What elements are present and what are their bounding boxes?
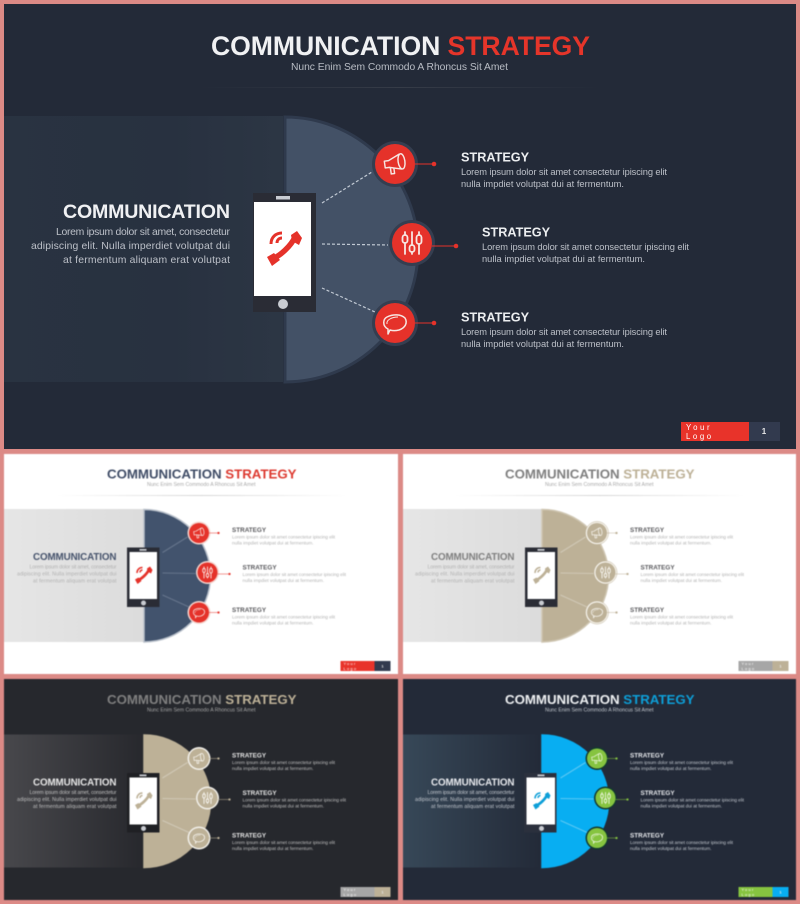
left text block: Lorem ipsum dolor sit amet, consectetur [30, 564, 117, 570]
strategy item 2: nulla impdiet volutpat dui at fermentum. [482, 254, 645, 264]
subtitle: Nunc Enim Sem Commodo A Rhoncus Sit Amet [545, 482, 654, 488]
strategy item 1: Lorem ipsum dolor sit amet consectetur ipiscing elit [630, 534, 734, 540]
left text block [415, 778, 515, 810]
connectors [560, 762, 594, 832]
footer logo and page number: Your [344, 887, 357, 892]
left text block: at fermentum aliquam erat volutpat [33, 578, 117, 584]
left text block: Lorem ipsum dolor sit amet, consectetur [56, 227, 231, 238]
strategy item 1: Lorem ipsum dolor sit amet consectetur ipiscing elit [630, 760, 734, 765]
strategy item 3 [586, 826, 734, 851]
strategy item 1: nulla impdiet volutpat dui at fermentum. [630, 540, 712, 546]
strategy item 2 [196, 786, 347, 810]
strategy item 1: nulla impdiet volutpat dui at fermentum. [232, 540, 314, 546]
strategy item 2 [196, 561, 347, 584]
half circle [144, 735, 211, 868]
strategy item 3: Lorem ipsum dolor sit amet consectetur ipiscing elit [630, 614, 734, 620]
strategy item 3: nulla impdiet volutpat dui at fermentum. [630, 620, 712, 626]
phone icon [253, 193, 316, 312]
strategy item 3: nulla impdiet volutpat dui at fermentum. [461, 339, 624, 349]
strategy item 1 [372, 141, 667, 189]
strategy item 2: nulla impdiet volutpat dui at fermentum. [640, 578, 722, 583]
half circle [144, 510, 211, 642]
strategy item 2: STRATEGY [640, 790, 675, 797]
phone icon [525, 548, 558, 607]
strategy item 1 [586, 522, 734, 546]
left text block: at fermentum aliquam erat volutpat [431, 804, 515, 810]
strategy item 3: nulla impdiet volutpat dui at fermentum. [232, 846, 314, 851]
strategy item 2: Lorem ipsum dolor sit amet consectetur ipiscing elit [640, 798, 745, 802]
footer logo and page number: Your [686, 423, 712, 432]
left text block: adipiscing elit. Nulla imperdiet volutpat dui [17, 572, 116, 578]
strategy item 1: nulla impdiet volutpat dui at fermentum. [461, 179, 624, 189]
left text block: at fermentum aliquam erat volutpat [431, 578, 515, 584]
strategy item 2 [594, 786, 745, 810]
strategy item 2: nulla impdiet volutpat dui at fermentum. [242, 578, 324, 583]
footer logo and page number: 1 [381, 890, 384, 894]
left text block: COMMUNICATION [33, 778, 116, 788]
subtitle: Nunc Enim Sem Commodo A Rhoncus Sit Amet [545, 708, 654, 714]
strategy item 1: Lorem ipsum dolor sit amet consectetur ipiscing elit [461, 167, 667, 177]
strategy item 1: STRATEGY [461, 150, 530, 164]
panel: charcoal slide, gray and tan [4, 679, 398, 900]
panel: navy slide, blue and green [403, 679, 796, 900]
dashed connectors [322, 172, 388, 312]
strategy item 3: Lorem ipsum dolor sit amet consectetur ipiscing elit [461, 327, 667, 337]
strategy item 1 [586, 747, 734, 771]
strategy item 1: STRATEGY [630, 527, 665, 534]
strategy item 3: STRATEGY [630, 607, 665, 614]
connectors [162, 762, 196, 832]
strategy item 2: Lorem ipsum dolor sit amet consectetur ipiscing elit [640, 572, 745, 577]
strategy item 3: nulla impdiet volutpat dui at fermentum. [630, 846, 712, 851]
strategy item 3: STRATEGY [232, 607, 267, 614]
left text block: COMMUNICATION [33, 552, 116, 563]
panel: main dark slide [4, 4, 796, 449]
left text block: COMMUNICATION [63, 201, 230, 223]
footer logo and page number: 1 [381, 664, 384, 668]
strategy item 3 [372, 300, 667, 349]
footer logo and page number: 1 [779, 890, 782, 894]
footer logo and page number: Logo [344, 892, 357, 897]
footer logo and page number [681, 422, 780, 441]
footer logo and page number: Your [344, 661, 357, 666]
strategy item 1 [188, 747, 336, 771]
strategy item 1: STRATEGY [630, 752, 665, 759]
footer logo and page number: Logo [742, 892, 755, 897]
strategy item 3: STRATEGY [232, 832, 267, 839]
strategy item 3: Lorem ipsum dolor sit amet consectetur ipiscing elit [630, 840, 734, 845]
strategy item 3: STRATEGY [630, 832, 665, 839]
strategy item 2 [389, 220, 689, 266]
title: COMMUNICATION STRATEGY [107, 692, 297, 707]
footer logo and page number: Logo [742, 666, 755, 671]
connectors [560, 537, 594, 607]
left band [4, 734, 144, 868]
strategy item 2: STRATEGY [242, 564, 277, 571]
strategy item 3: STRATEGY [461, 310, 530, 324]
strategy item 1: STRATEGY [232, 752, 267, 759]
strategy item 2: Lorem ipsum dolor sit amet consectetur ipiscing elit [242, 798, 347, 802]
strategy item 1: STRATEGY [232, 527, 267, 534]
footer logo and page number: Your [742, 887, 755, 892]
footer logo and page number [738, 887, 788, 897]
strategy item 1: Lorem ipsum dolor sit amet consectetur ipiscing elit [232, 534, 336, 540]
strategy item 1: nulla impdiet volutpat dui at fermentum. [630, 766, 712, 771]
strategy item 3 [586, 601, 734, 626]
strategy item 1: nulla impdiet volutpat dui at fermentum. [232, 766, 314, 771]
subtitle: Nunc Enim Sem Commodo A Rhoncus Sit Amet [147, 708, 256, 714]
strategy item 2: nulla impdiet volutpat dui at fermentum. [640, 804, 722, 808]
phone icon [524, 773, 556, 832]
left text block [415, 552, 515, 584]
left text block: adipiscing elit. Nulla imperdiet volutpat dui [31, 241, 230, 252]
strategy item 3: Lorem ipsum dolor sit amet consectetur ipiscing elit [232, 840, 336, 845]
left text block: at fermentum aliquam erat volutpat [33, 804, 117, 810]
strategy item 1: Lorem ipsum dolor sit amet consectetur ipiscing elit [232, 760, 336, 765]
left text block: COMMUNICATION [431, 552, 514, 563]
footer logo and page number: 1 [762, 427, 767, 436]
footer logo and page number [738, 661, 788, 671]
strategy item 2: Lorem ipsum dolor sit amet consectetur ipiscing elit [242, 572, 347, 577]
half circle [542, 510, 608, 642]
strategy item 3 [188, 601, 336, 626]
strategy item 3: Lorem ipsum dolor sit amet consectetur ipiscing elit [232, 614, 336, 620]
left text block [17, 552, 117, 584]
phone icon [127, 773, 160, 832]
left band [4, 509, 144, 642]
panel: white slide, navy and red [4, 454, 398, 674]
left band [403, 734, 542, 868]
left band [403, 509, 542, 642]
left text block: COMMUNICATION [431, 778, 514, 788]
half circle [285, 117, 418, 382]
strategy item 2: nulla impdiet volutpat dui at fermentum. [242, 804, 324, 808]
strategy item 2: Lorem ipsum dolor sit amet consectetur ipiscing elit [482, 242, 689, 252]
strategy item 3: nulla impdiet volutpat dui at fermentum. [232, 620, 314, 626]
left text block: Lorem ipsum dolor sit amet, consectetur [428, 790, 515, 796]
left text block: at fermentum aliquam erat volutpat [63, 255, 230, 266]
title: COMMUNICATION STRATEGY [107, 466, 297, 482]
left text block [31, 201, 231, 266]
footer logo and page number: Logo [686, 432, 714, 441]
phone icon [127, 548, 160, 607]
left band [4, 116, 283, 382]
footer logo and page number [340, 887, 390, 897]
footer logo and page number: 1 [779, 664, 782, 668]
left text block: adipiscing elit. Nulla imperdiet volutpat dui [415, 572, 514, 578]
strategy item 2 [594, 561, 745, 584]
left text block: Lorem ipsum dolor sit amet, consectetur [30, 790, 117, 796]
left text block: adipiscing elit. Nulla imperdiet volutpat dui [415, 797, 514, 803]
title: COMMUNICATION STRATEGY [505, 692, 695, 707]
connectors [162, 537, 196, 607]
strategy item 2: STRATEGY [242, 790, 277, 797]
strategy item 3 [188, 826, 336, 851]
half circle [542, 735, 608, 868]
title: COMMUNICATION STRATEGY [505, 466, 695, 482]
strategy item 2: STRATEGY [640, 564, 675, 571]
strategy item 2: STRATEGY [482, 226, 551, 240]
left text block: adipiscing elit. Nulla imperdiet volutpat dui [17, 797, 116, 803]
subtitle: Nunc Enim Sem Commodo A Rhoncus Sit Amet [147, 482, 256, 488]
title: COMMUNICATION STRATEGY [211, 31, 590, 61]
strategy item 1 [188, 522, 336, 546]
panel: white slide, gray and tan [403, 454, 796, 674]
footer logo and page number: Logo [344, 666, 357, 671]
footer logo and page number [340, 661, 390, 671]
left text block: Lorem ipsum dolor sit amet, consectetur [428, 564, 515, 570]
left text block [17, 778, 117, 810]
subtitle: Nunc Enim Sem Commodo A Rhoncus Sit Amet [291, 62, 508, 73]
footer logo and page number: Your [742, 661, 755, 666]
